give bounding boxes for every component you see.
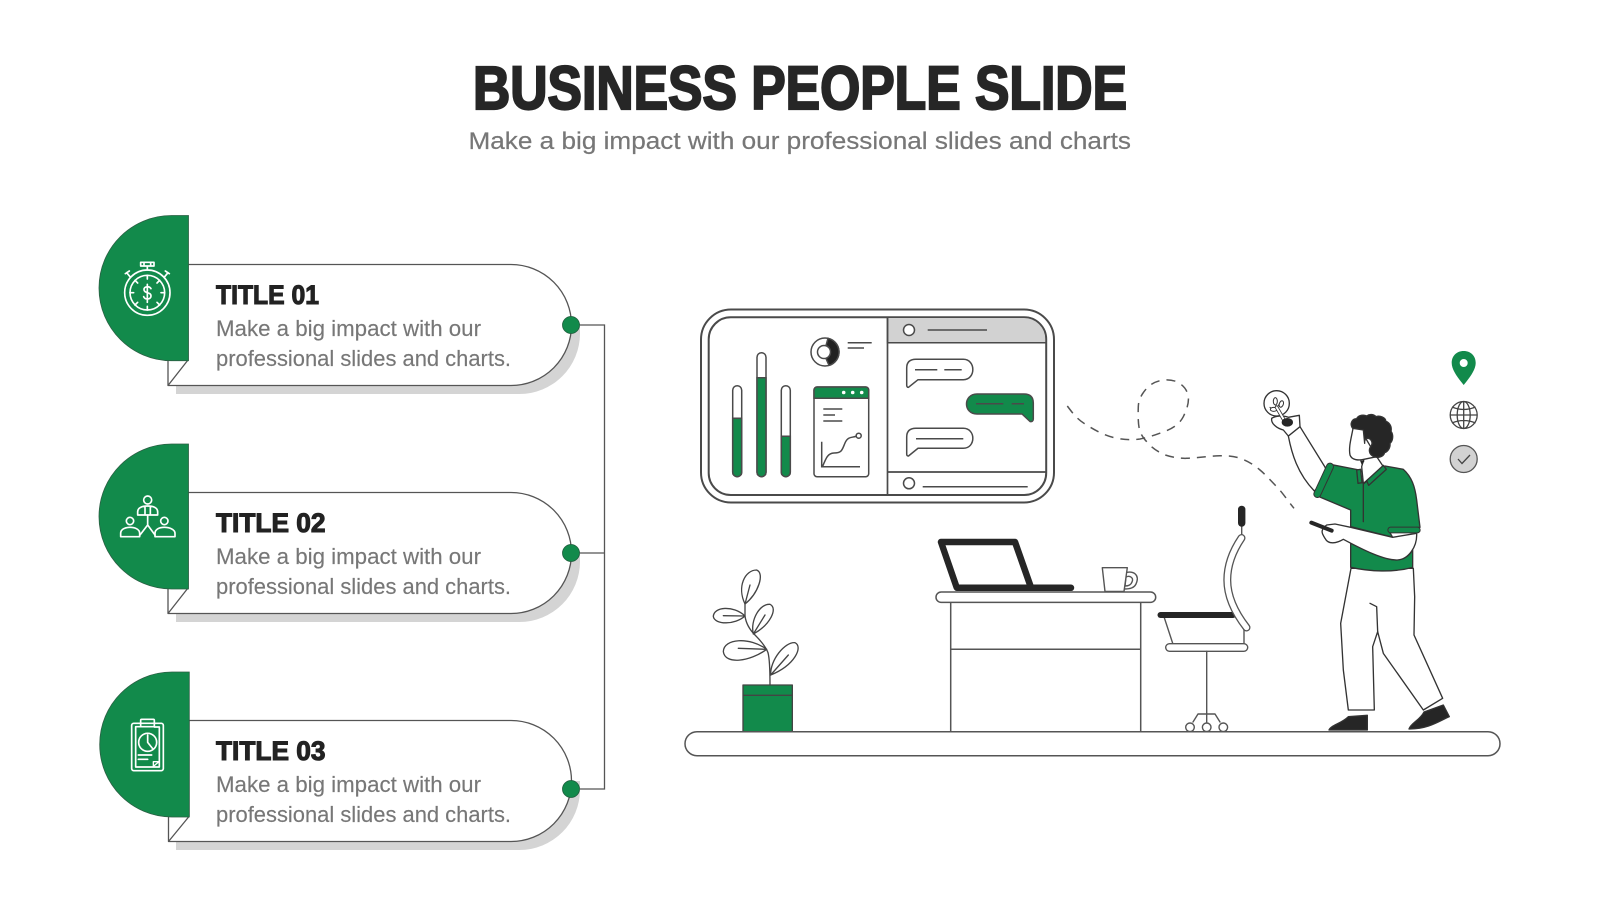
icon: clipboard report [132, 719, 163, 771]
panel heading: TITLE 01 [216, 280, 319, 310]
icon: stopwatch [125, 262, 170, 315]
coffee cup [1102, 568, 1137, 592]
green half circle [99, 216, 188, 361]
panel body text: professional slides and charts. [216, 802, 511, 827]
forearm and hand [1322, 524, 1417, 560]
shoes [1329, 705, 1449, 730]
screen frame [701, 310, 1054, 502]
panel body text: Make a big impact with our [216, 772, 481, 797]
pen [1311, 523, 1332, 531]
panel body text: professional slides and charts. [216, 346, 511, 371]
raised arm and hand [1288, 427, 1330, 491]
subtitle: Make a big impact with our professional slides and charts [468, 128, 1131, 155]
collar [1357, 465, 1386, 485]
panel body text: Make a big impact with our [216, 544, 481, 569]
title: BUSINESS PEOPLE SLIDE [473, 54, 1127, 122]
desk [936, 592, 1156, 732]
panel body text: professional slides and charts. [216, 574, 511, 599]
plant pot [743, 685, 792, 732]
green half circle [100, 672, 189, 817]
shirt sleeve cuff [1391, 520, 1417, 540]
icon: globe [1450, 402, 1477, 428]
node dot [562, 780, 580, 798]
chat bubble: green [966, 394, 1033, 422]
panel body text [216, 316, 511, 371]
person holding a light bulb [1264, 391, 1449, 730]
donut chart [811, 338, 872, 366]
floor [685, 732, 1500, 756]
trousers [1341, 568, 1443, 710]
icon: check badge [1450, 446, 1477, 472]
node dot [562, 316, 580, 334]
chat bubble [907, 359, 973, 387]
card outline [168, 264, 571, 386]
panel: title 02 [99, 444, 580, 622]
card shadow [176, 553, 580, 622]
dashed idea path [1067, 380, 1294, 508]
plant [713, 570, 798, 732]
mini line chart window [814, 387, 869, 477]
laptop [941, 542, 1071, 588]
panel heading: TITLE 03 [216, 736, 326, 766]
dashboard screen illustration [701, 310, 1054, 502]
hair [1351, 415, 1393, 457]
chat bubble [907, 428, 973, 456]
icon: team of people [121, 496, 175, 537]
chat header bar [888, 317, 1046, 343]
card outline [168, 492, 571, 614]
panel body text: Make a big impact with our [216, 316, 481, 341]
office chair [1160, 506, 1248, 732]
node dot [562, 544, 580, 562]
green half circle [99, 444, 188, 589]
icon: location pin [1452, 351, 1476, 385]
card shadow [176, 325, 580, 394]
connector line linking the three panels [571, 325, 604, 789]
shirt [1315, 464, 1420, 571]
light bulb [1264, 391, 1300, 436]
card shadow [176, 781, 580, 850]
bar chart [733, 353, 790, 477]
neck and face [1362, 457, 1383, 483]
panel: title 01 [99, 216, 580, 394]
panel: title 03 [100, 672, 580, 850]
panel body text [216, 772, 511, 827]
card outline [168, 720, 571, 842]
panel heading: TITLE 02 [216, 508, 326, 538]
panel body text [216, 544, 511, 599]
